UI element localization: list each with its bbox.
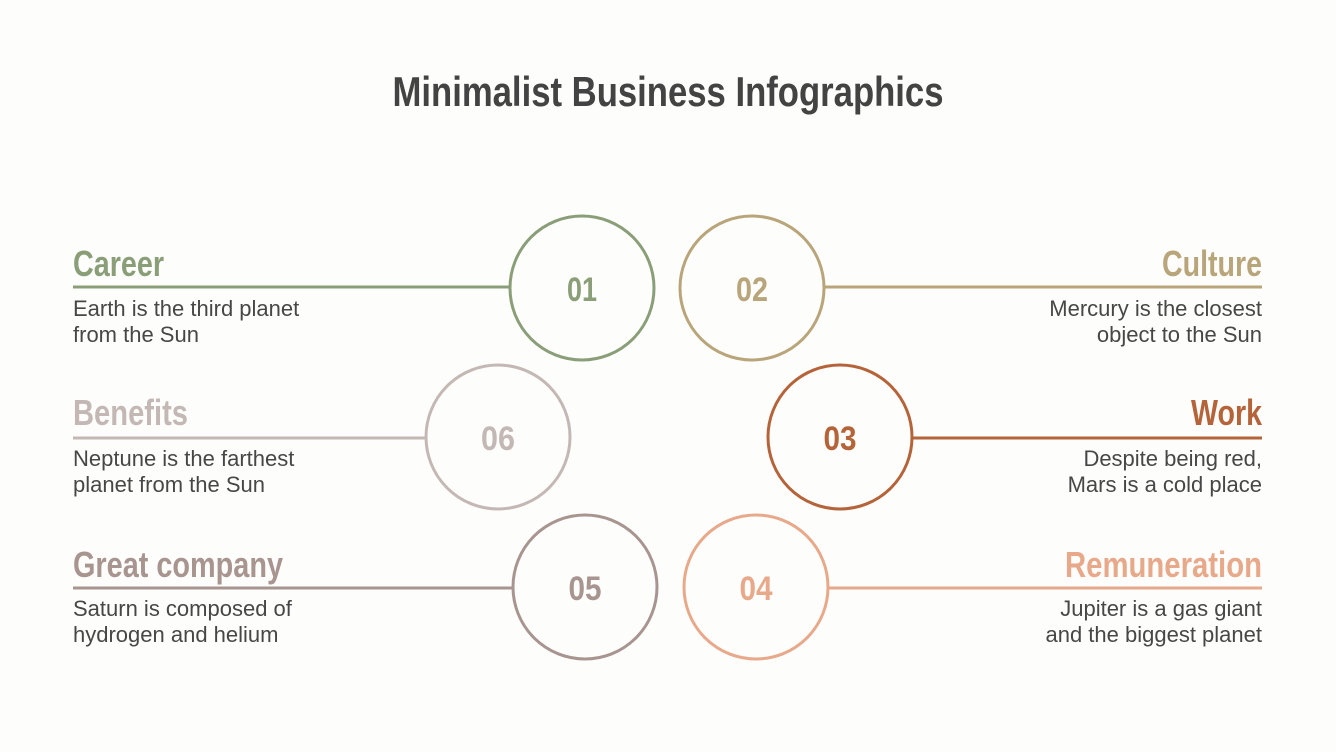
circle 03 [768, 365, 912, 509]
item: career [73, 216, 654, 360]
item: great company: Great company [73, 544, 283, 585]
item: great company: Saturn is composed of [73, 596, 293, 621]
item: remuneration: Remuneration [1065, 544, 1262, 585]
item: culture [680, 216, 1262, 360]
item: benefits: Neptune is the farthest [73, 446, 294, 471]
title: Minimalist Business Infographics [392, 68, 944, 115]
item: career: from the Sun [73, 322, 199, 347]
item: culture: Culture [1162, 243, 1262, 284]
item: great company [73, 515, 657, 659]
item: work [768, 365, 1263, 509]
circle 05: 05 [568, 570, 602, 608]
circle 01 [510, 216, 654, 360]
circle 05 [513, 515, 657, 659]
item: career: Earth is the third planet [73, 296, 299, 321]
item: remuneration: Jupiter is a gas giant [1060, 596, 1262, 621]
circle 02 [680, 216, 824, 360]
item: work: Work [1191, 392, 1263, 433]
circle 03: 03 [824, 420, 856, 458]
item: work: Despite being red, [1083, 446, 1262, 471]
item: benefits: Benefits [73, 392, 188, 433]
item: great company: hydrogen and helium [73, 622, 278, 647]
item: career: Career [73, 243, 164, 284]
item: culture: Mercury is the closest [1049, 296, 1262, 321]
circle 02: 02 [736, 271, 768, 309]
circle 06 [426, 365, 570, 509]
item: culture: object to the Sun [1097, 322, 1262, 347]
item: remuneration: and the biggest planet [1045, 622, 1262, 647]
circle 04: 04 [740, 570, 773, 608]
item: benefits [73, 365, 570, 509]
circle 01: 01 [567, 271, 597, 309]
item: work: Mars is a cold place [1068, 472, 1262, 497]
circle 04 [684, 515, 828, 659]
item: benefits: planet from the Sun [73, 472, 265, 497]
item: remuneration [684, 515, 1262, 659]
circle 06: 06 [481, 420, 515, 458]
